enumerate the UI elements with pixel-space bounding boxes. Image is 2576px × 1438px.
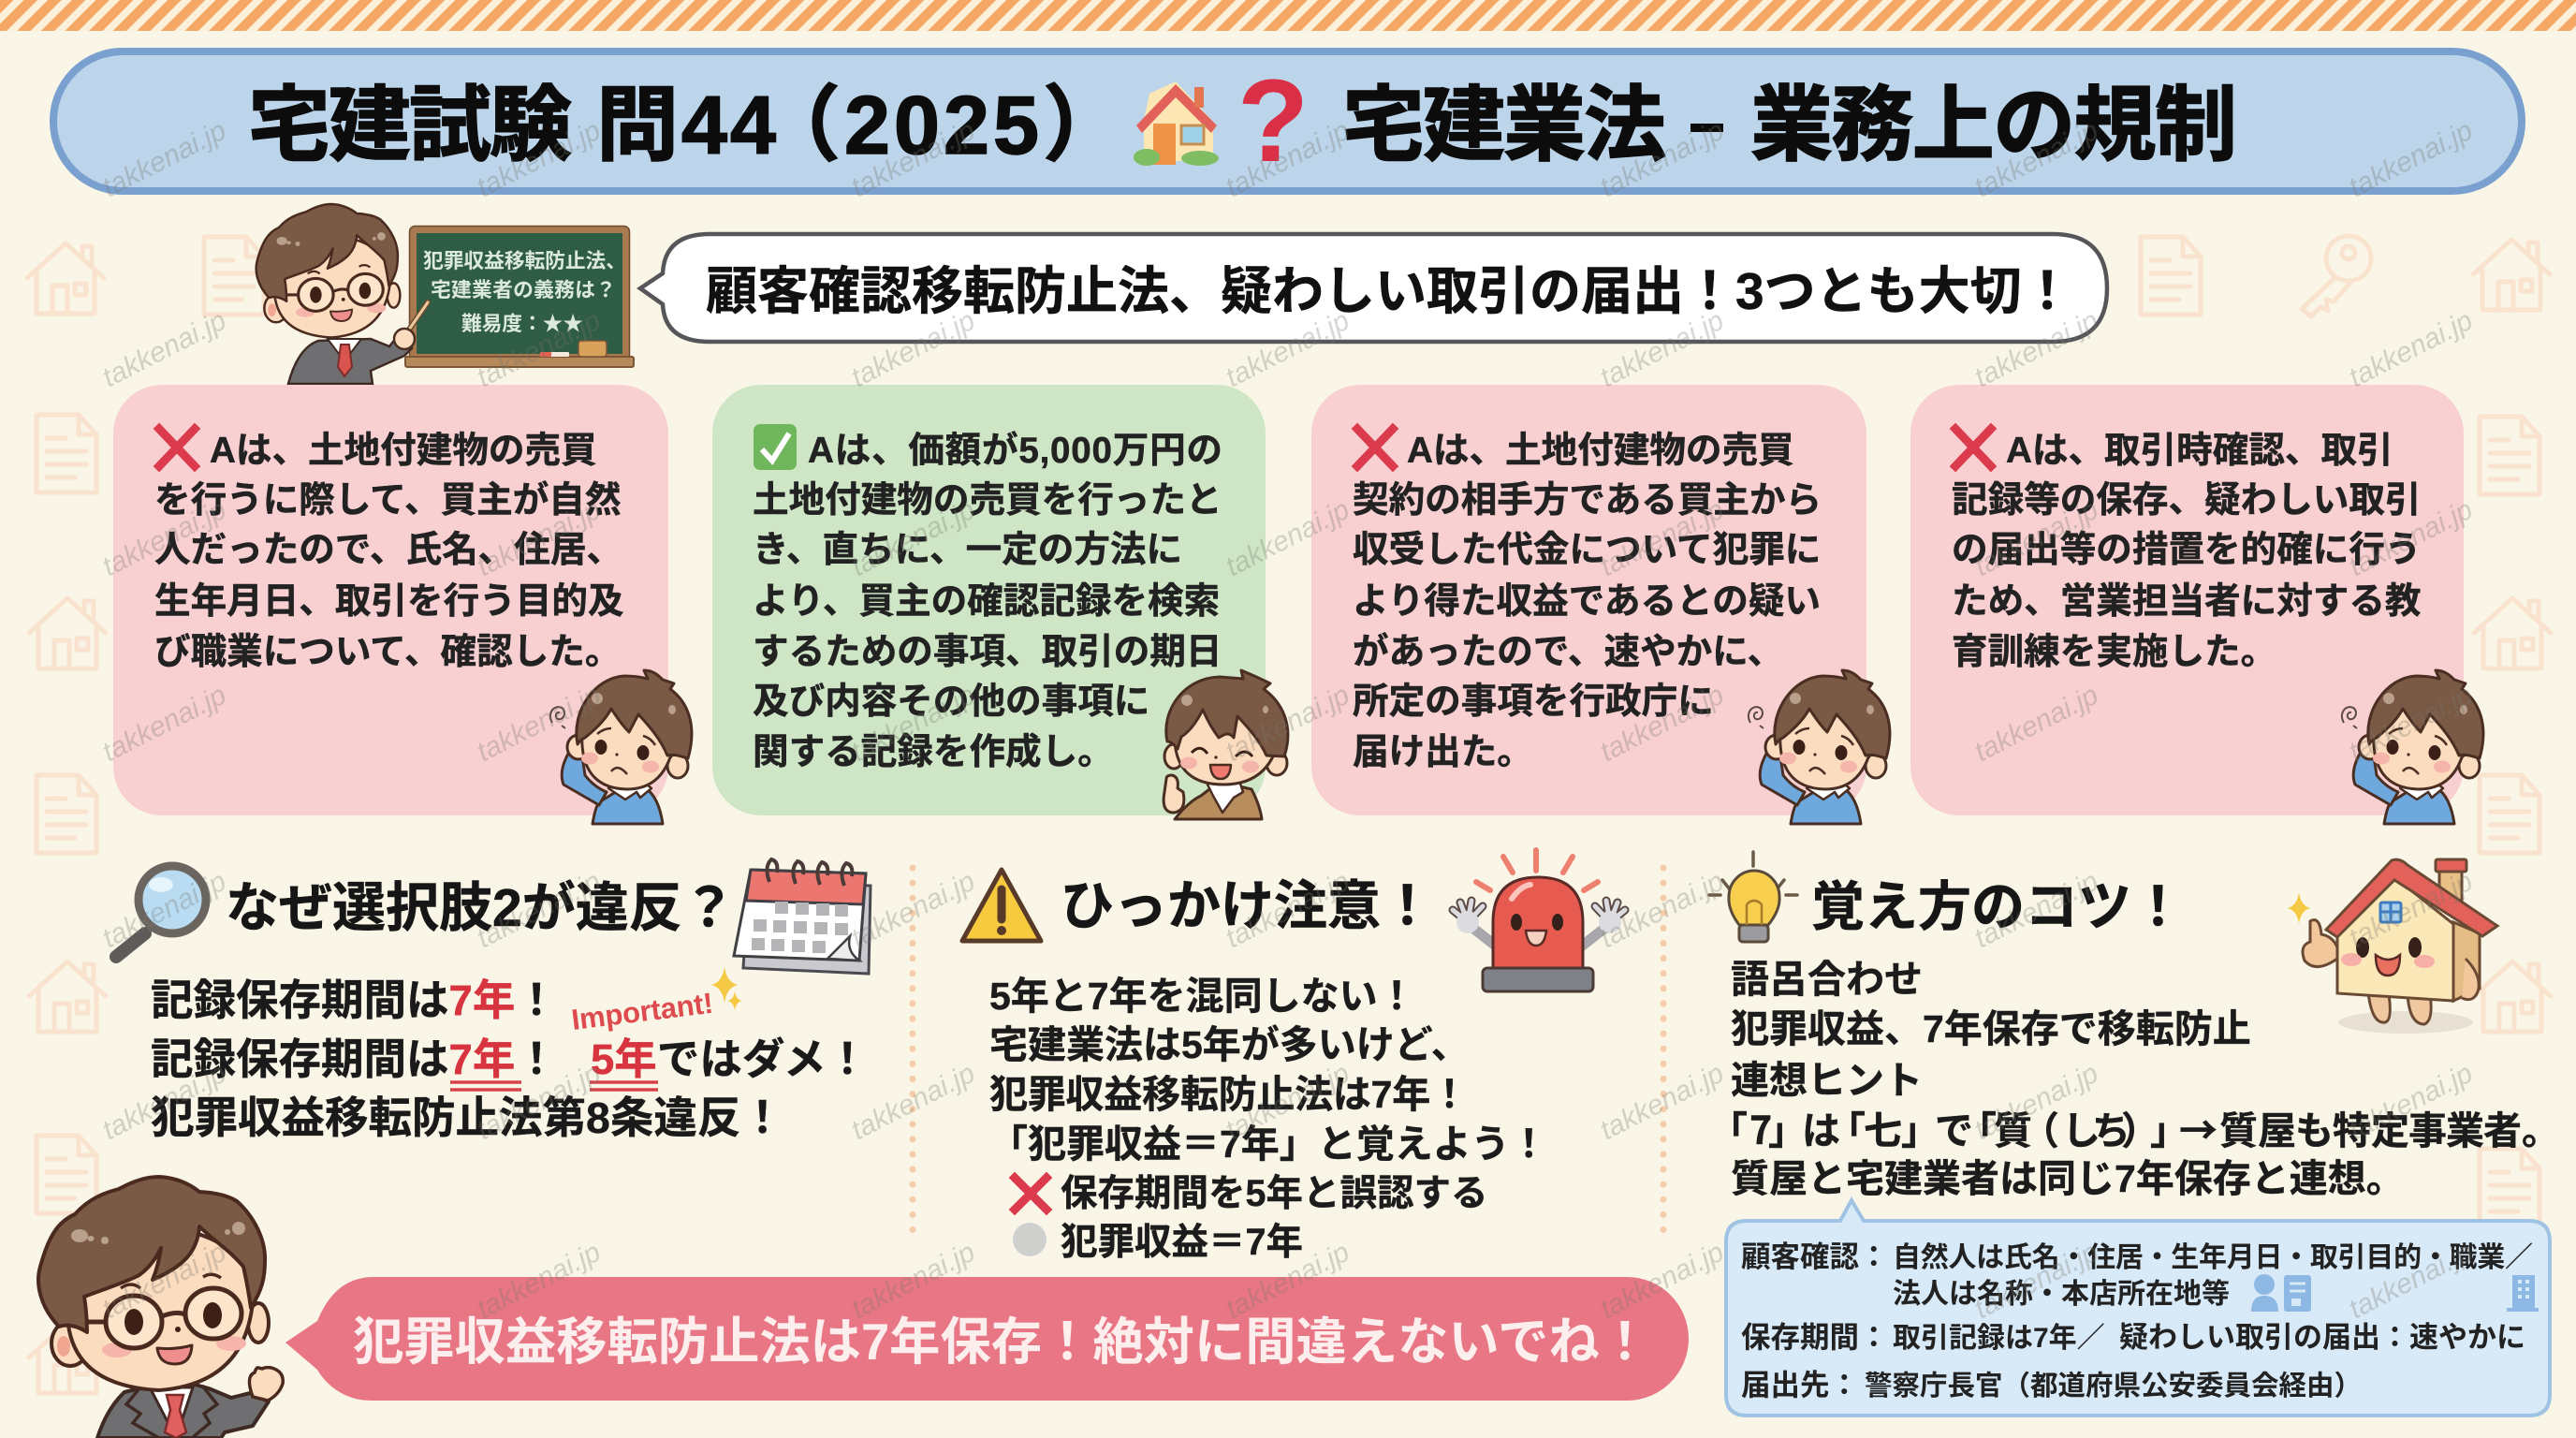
card 2 text: き、直ちに、一定の方法に — [753, 530, 1182, 570]
card 2: correct — [712, 385, 1288, 819]
row: retention: 取引記録は7年／ — [1893, 1323, 2105, 1354]
character: worried boy — [550, 670, 692, 824]
icon: warning triangle — [962, 870, 1041, 941]
chalkboard: 難易度：★★ — [461, 312, 583, 335]
label: Important: Important! — [570, 987, 715, 1036]
watermarks: takkenai.jp — [846, 680, 980, 768]
watermarks: takkenai.jp — [1595, 494, 1729, 582]
watermarks: takkenai.jp — [97, 1058, 231, 1146]
watermarks: takkenai.jp — [2344, 866, 2478, 954]
watermarks: takkenai.jp — [472, 494, 606, 582]
title text left: 問44 — [596, 79, 776, 171]
teacher at chalkboard — [256, 204, 634, 384]
title banner — [53, 51, 2522, 191]
text: retention period — [151, 976, 869, 1142]
icon: x mark — [159, 429, 195, 466]
watermarks: takkenai.jp — [1969, 305, 2103, 393]
heading: なぜ選択肢2が違反？ — [226, 878, 736, 938]
card 4 text — [1952, 431, 2422, 672]
chalkboard: 犯罪収益移転防止法、 — [423, 249, 626, 272]
heading: 覚え方のコツ！ — [1811, 877, 2185, 937]
watermarks: takkenai.jp — [846, 305, 980, 393]
chalkboard: 宅建業者の義務は？ — [431, 278, 616, 301]
watermarks: takkenai.jp — [1969, 1058, 2103, 1146]
title text left — [248, 79, 1125, 171]
callout: final message: 犯罪収益移転防止法は7年保存！絶対に間違えないでね！ — [353, 1313, 1650, 1371]
row: customer check — [1741, 1240, 2533, 1310]
icon: check mark — [754, 424, 797, 470]
watermarks: takkenai.jp — [1595, 866, 1729, 954]
watermarks: takkenai.jp — [97, 115, 231, 203]
text block — [1709, 958, 2560, 1200]
card 3 text: より得た収益であるとの疑い — [1353, 581, 1821, 622]
card 2 text: Aは、価額が5,000万円の — [808, 431, 1222, 471]
text block: 連想ヒント — [1731, 1059, 1923, 1102]
row: customer check: 自然人は氏名・住居・生年月日・取引目的・職業／ — [1893, 1242, 2533, 1273]
card 1 text: Aは、土地付建物の売買 — [210, 431, 597, 471]
row: retention: 保存期間： — [1741, 1320, 1889, 1354]
card 2 text: 土地付建物の売買を行ったと — [753, 480, 1222, 521]
row: notify to: 届出先： — [1741, 1368, 1859, 1401]
watermarks: takkenai.jp — [2344, 494, 2478, 582]
text: retention period: 5年ではダメ！ — [591, 1035, 869, 1083]
character: happy boy — [1164, 670, 1288, 819]
watermarks: takkenai.jp — [97, 305, 231, 393]
text block: 「犯罪収益＝7年」と覚えよう！ — [989, 1123, 1548, 1166]
card 3 text — [1353, 431, 1822, 772]
title text left: 宅建試験 — [248, 79, 572, 171]
card 4 text: ため、営業担当者に対する教 — [1952, 581, 2422, 622]
text block: 5年と7年を混同しない！ — [989, 975, 1416, 1018]
icon: magnifier — [116, 866, 206, 957]
card 4 text: の届出等の措置を的確に行う — [1952, 530, 2422, 570]
watermarks: takkenai.jp — [1969, 115, 2103, 203]
icon: calendar — [734, 859, 871, 974]
title text right: 宅建業法 — [1342, 79, 1666, 171]
watermarks: takkenai.jp — [1969, 680, 2103, 768]
watermarks: takkenai.jp — [1595, 115, 1729, 203]
watermarks: takkenai.jp — [846, 494, 980, 582]
character: worried boy — [2342, 670, 2483, 824]
section: trap warning — [962, 850, 1625, 1263]
speech bubble: summary: 顧客確認移転防止法、疑わしい取引の届出！3つとも大切！ — [706, 262, 2073, 320]
row: customer check: 顧客確認： — [1741, 1240, 1889, 1273]
callout: final message — [285, 1277, 1689, 1401]
watermarks: takkenai.jp — [2344, 1237, 2478, 1325]
icon: question mark: ? — [1237, 56, 1309, 186]
card 4 text: 記録等の保存、疑わしい取引 — [1952, 480, 2422, 521]
wrong point: 保存期間を5年と誤認する — [1061, 1173, 1487, 1214]
text block: 質屋と宅建業者は同じ7年保存と連想。 — [1731, 1157, 2405, 1200]
watermarks: takkenai.jp — [2344, 115, 2478, 203]
watermarks: takkenai.jp — [472, 1237, 606, 1325]
teacher bottom left — [38, 1177, 283, 1438]
text: retention period: 記録保存期間は7年！ — [151, 1035, 558, 1083]
red double underlines — [450, 1082, 658, 1090]
icon: light bulb — [1709, 852, 1797, 942]
card 3 text: 契約の相手方である買主から — [1353, 480, 1822, 521]
watermarks: takkenai.jp — [1221, 115, 1354, 203]
watermarks: takkenai.jp — [846, 866, 980, 954]
watermarks: takkenai.jp — [472, 680, 606, 768]
row: customer check: 法人は名称・本店所在地等 — [1893, 1279, 2230, 1310]
watermarks: takkenai.jp — [1595, 680, 1729, 768]
watermarks: takkenai.jp — [97, 680, 231, 768]
watermarks: takkenai.jp — [846, 115, 980, 203]
info box — [1726, 1200, 2550, 1416]
row: retention — [1741, 1320, 2525, 1354]
watermarks: takkenai.jp — [1221, 494, 1354, 582]
watermarks: takkenai.jp — [97, 1237, 231, 1325]
icon: building — [2507, 1275, 2539, 1312]
watermarks: takkenai.jp — [1595, 1058, 1729, 1146]
card 4 text: Aは、取引時確認、取引 — [2006, 431, 2393, 471]
watermarks: takkenai.jp — [1221, 305, 1354, 393]
section: memory tips — [1709, 852, 2560, 1416]
card 2 text: するための事項、取引の期日 — [753, 632, 1222, 672]
watermarks: takkenai.jp — [2344, 680, 2478, 768]
row: retention: 疑わしい取引の届出：速やかに — [2119, 1321, 2525, 1354]
top stripe band — [0, 0, 2576, 31]
card 1 text: を行うに際して、買主が自然 — [154, 480, 621, 521]
text: retention period: 犯罪収益移転防止法第8条違反！ — [151, 1093, 784, 1142]
card 4: wrong — [1910, 385, 2483, 824]
watermarks: takkenai.jp — [1595, 305, 1729, 393]
card 3 text: 届け出た。 — [1353, 732, 1533, 772]
card 3 text: 所定の事項を行政庁に — [1353, 682, 1714, 722]
card 1: wrong — [113, 385, 692, 824]
icon: x mark — [1357, 429, 1393, 466]
card 3 text: Aは、土地付建物の売買 — [1407, 431, 1794, 471]
watermarks: takkenai.jp — [1221, 1237, 1354, 1325]
watermarks: takkenai.jp — [97, 494, 231, 582]
watermarks: takkenai.jp — [846, 1058, 980, 1146]
watermarks: takkenai.jp — [1221, 866, 1354, 954]
watermarks: takkenai.jp — [472, 1058, 606, 1146]
watermarks: takkenai.jp — [2344, 305, 2478, 393]
card 4 text: 育訓練を実施した。 — [1952, 632, 2276, 672]
card 3 text: があったので、速やかに、 — [1353, 632, 1783, 672]
card 1 text — [154, 431, 624, 672]
card 1 text: 人だったので、氏名、住居、 — [154, 530, 622, 570]
text block: 宅建業法は5年が多いけど、 — [989, 1023, 1470, 1066]
card 2 text: 及び内容その他の事項に — [753, 682, 1149, 722]
icon: house mascot — [2287, 859, 2497, 1034]
row: notify to: 警察庁長官（都道府県公安委員会経由） — [1865, 1371, 2362, 1401]
text block — [989, 975, 1548, 1166]
text block: 犯罪収益、7年保存で移転防止 — [1731, 1007, 2251, 1050]
correct point: 犯罪収益＝7年 — [1061, 1222, 1303, 1263]
text: retention period: 記録保存期間は7年！ — [151, 976, 558, 1024]
icon: sparkles — [711, 967, 742, 1010]
character: worried boy — [1749, 670, 1890, 824]
watermarks: takkenai.jp — [1969, 494, 2103, 582]
watermarks: takkenai.jp — [97, 866, 231, 954]
speech bubble: summary — [640, 234, 2107, 342]
watermarks: takkenai.jp — [1221, 1058, 1354, 1146]
watermarks: takkenai.jp — [1595, 1237, 1729, 1325]
watermarks: takkenai.jp — [846, 1237, 980, 1325]
heading: ひっかけ注意！ — [1061, 876, 1434, 936]
icon: siren mascot — [1453, 850, 1625, 991]
card 2 text — [753, 431, 1222, 772]
icon: house — [1134, 81, 1219, 166]
card 3: wrong — [1311, 385, 1890, 824]
watermarks: takkenai.jp — [1969, 1237, 2103, 1325]
icon: x mark — [1955, 429, 1991, 466]
dotted divider — [1661, 868, 1666, 1232]
watermarks: takkenai.jp — [1969, 866, 2103, 954]
title text left: （2025） — [758, 79, 1125, 171]
watermarks: takkenai.jp — [472, 866, 606, 954]
section: why option 2 — [116, 859, 871, 1142]
icon: person and document — [2251, 1274, 2311, 1312]
watermarks: takkenai.jp — [2344, 1058, 2478, 1146]
text block: 「7」は「七」で「質（しち）」→質屋も特定事業者。 — [1709, 1099, 2560, 1155]
card 1 text: び職業について、確認した。 — [154, 632, 621, 672]
watermarks: takkenai.jp — [472, 305, 606, 393]
watermarks: takkenai.jp — [1221, 680, 1354, 768]
background icons — [27, 236, 2551, 1393]
chalkboard — [405, 227, 634, 367]
card 2 text: 関する記録を作成し。 — [753, 732, 1114, 772]
text block: 犯罪収益移転防止法は7年！ — [989, 1073, 1469, 1116]
text block: 語呂合わせ — [1731, 958, 1923, 1001]
watermarks: takkenai.jp — [472, 115, 606, 203]
title text right: 業務上の規制 — [1750, 79, 2237, 171]
teacher figure — [256, 204, 428, 384]
card 1 text: 生年月日、取引を行う目的及 — [154, 581, 624, 622]
title text right — [1342, 79, 2237, 171]
dotted divider — [910, 868, 915, 1232]
card 3 text: 収受した代金について犯罪に — [1353, 530, 1821, 570]
card 2 text: より、買主の確認記録を検索 — [753, 581, 1220, 622]
